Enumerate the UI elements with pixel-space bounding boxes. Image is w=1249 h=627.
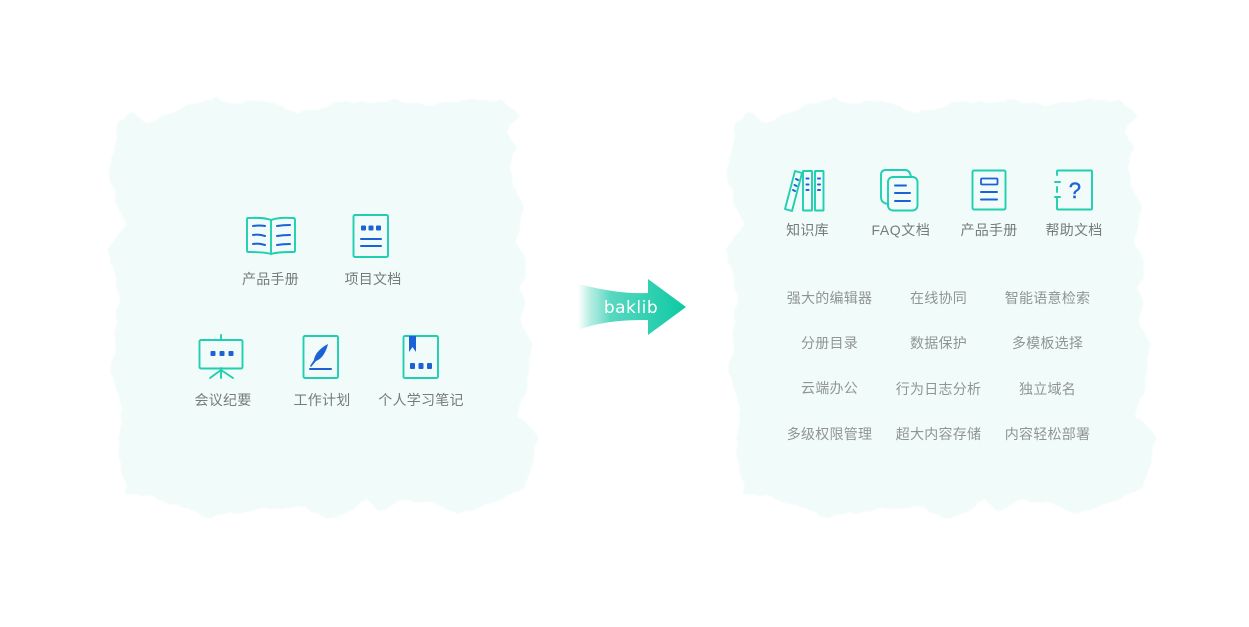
label: FAQ documents: FAQ文档	[871, 222, 931, 238]
panel: left background blob	[108, 98, 538, 518]
feature list: 在线协同	[910, 290, 967, 306]
feature list: 超大内容存储	[896, 426, 981, 442]
icon: project document	[354, 215, 388, 257]
label: work plan: 工作计划	[294, 392, 350, 408]
icon: notebook with bookmark	[404, 336, 438, 378]
icon: help document: ?	[1069, 178, 1081, 203]
label: help document: 帮助文档	[1046, 222, 1102, 238]
label: personal study notes: 个人学习笔记	[378, 392, 464, 408]
icon: open book	[247, 218, 295, 254]
label: product manual: 产品手册	[960, 222, 1018, 238]
icon: knowledge base books	[785, 171, 824, 211]
feature list: 数据保护	[910, 335, 967, 351]
icon: help document	[1055, 170, 1092, 210]
feature list: 内容轻松部署	[1005, 426, 1090, 442]
label: knowledge base: 知识库	[786, 222, 829, 238]
feature list: 强大的编辑器	[787, 290, 872, 306]
feature list: 云端办公	[801, 380, 858, 396]
feature list: 独立域名	[1019, 381, 1076, 397]
label: project document: 项目文档	[344, 271, 402, 287]
icon: quill on page	[304, 336, 338, 378]
arrow: baklib	[578, 279, 686, 335]
icon: presentation board	[200, 335, 242, 378]
label: product manual: 产品手册	[242, 271, 299, 287]
panel: right background blob	[726, 98, 1156, 518]
label: meeting minutes: 会议纪要	[194, 392, 252, 408]
arrow: baklib: baklib	[604, 298, 658, 318]
feature list: 多模板选择	[1012, 335, 1083, 351]
icon: FAQ documents	[881, 170, 918, 210]
feature list: 行为日志分析	[896, 381, 981, 397]
feature list: 智能语意检索	[1005, 290, 1090, 306]
feature list	[787, 290, 1090, 442]
icon: product manual document	[972, 170, 1006, 210]
feature list: 分册目录	[801, 335, 858, 351]
feature list: 多级权限管理	[787, 426, 872, 442]
